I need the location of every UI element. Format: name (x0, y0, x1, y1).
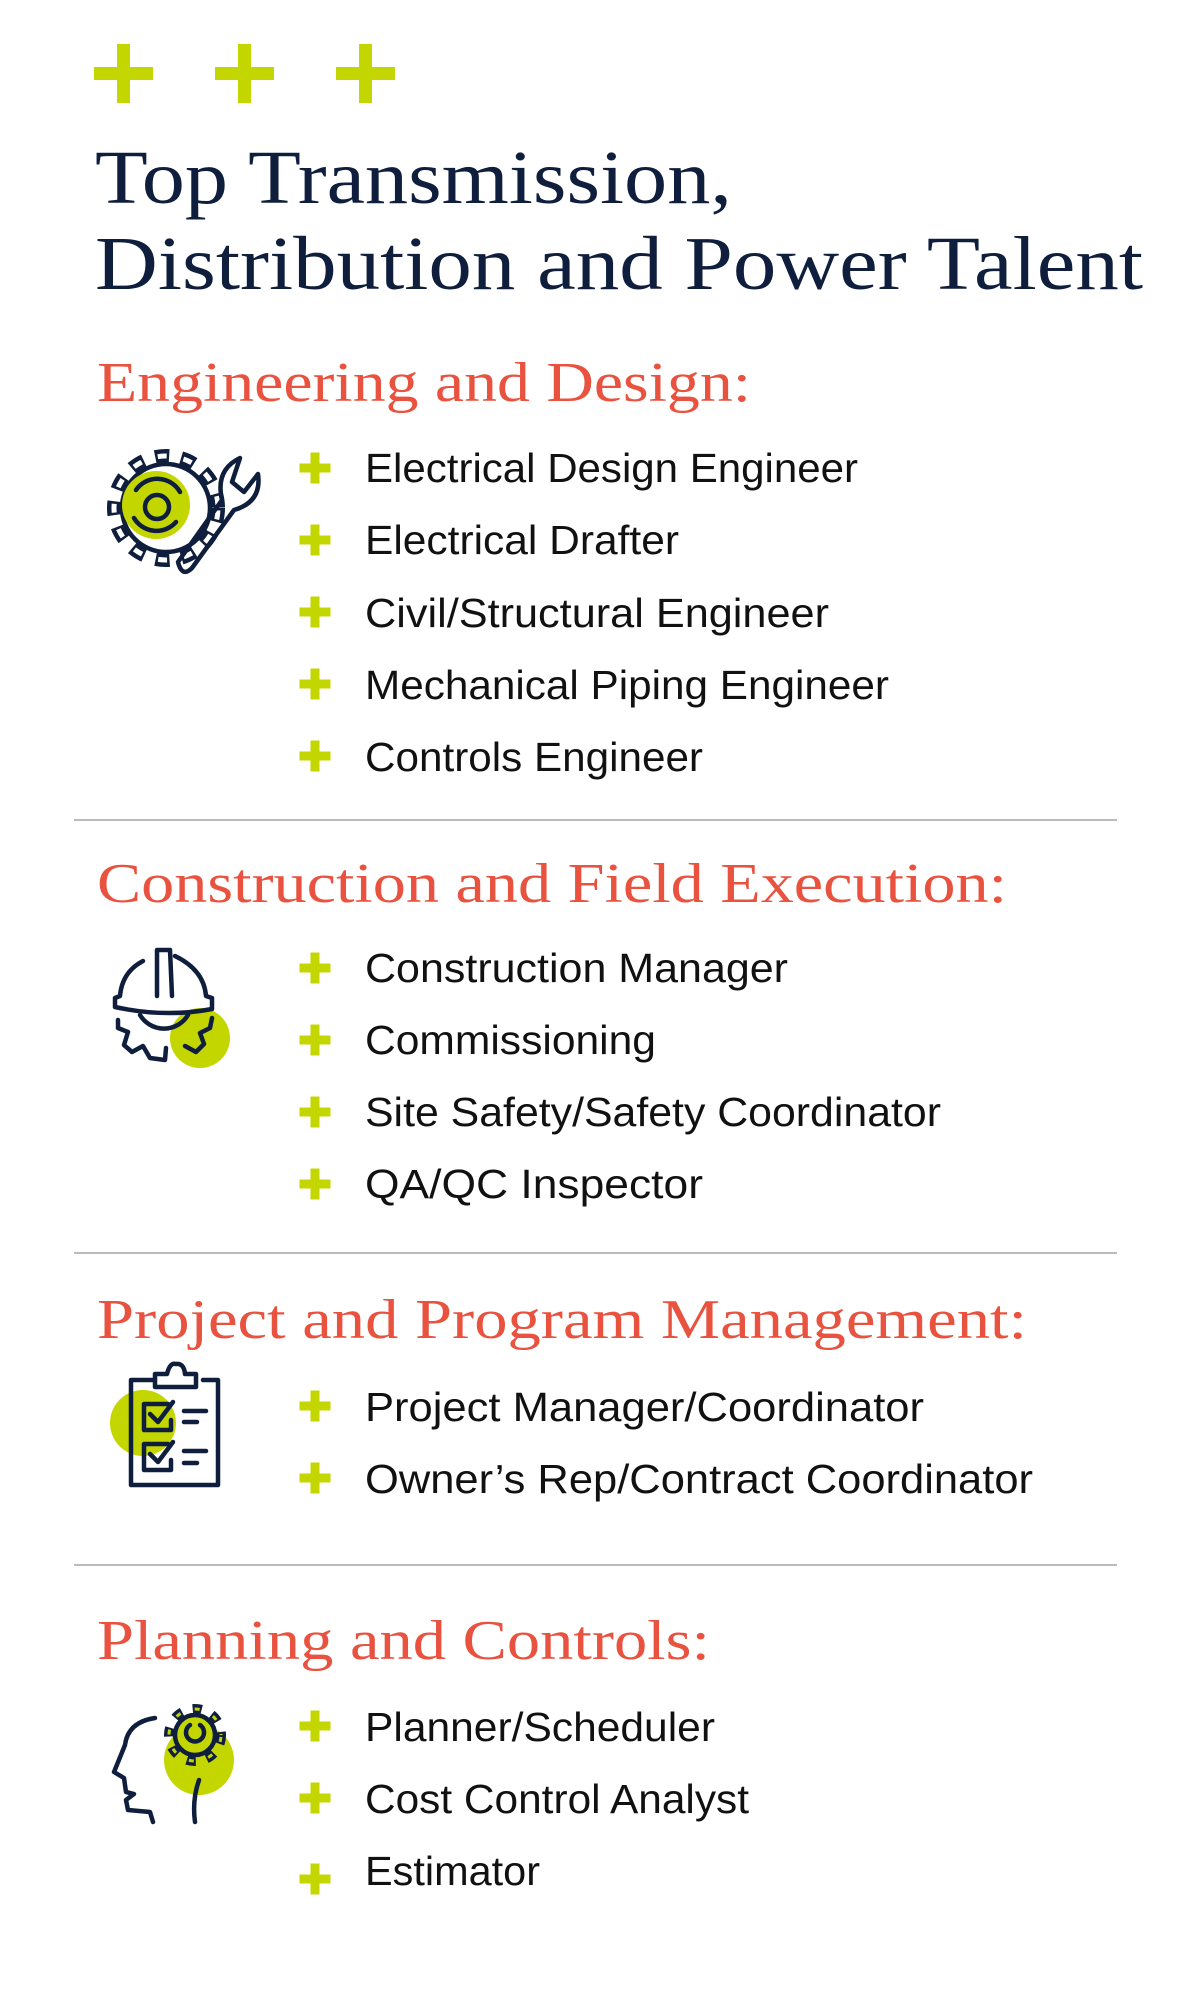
title: Distribution and Power Talent (95, 222, 1143, 306)
heading: Planning: Planning and Controls: (97, 1610, 710, 1672)
icon: head with gear (114, 1709, 234, 1822)
list: engineering: Electrical Drafter (365, 517, 679, 563)
list: engineering: Controls Engineer (365, 734, 703, 780)
list: project: Project Manager/Coordinator (365, 1384, 924, 1430)
title: Top Transmission, (95, 136, 732, 220)
decorative plus signs (94, 44, 395, 103)
list: engineering: Civil/Structural Engineer (365, 590, 829, 636)
list: construction: Site Safety/Safety Coordinator (365, 1089, 941, 1135)
list: engineering: Electrical Design Engineer (365, 445, 858, 491)
icon: hard hat with gear (115, 950, 230, 1068)
list: engineering (300, 445, 889, 780)
list: project: Owner’s Rep/Contract Coordinator (365, 1456, 1033, 1502)
list: planning: Cost Control Analyst (365, 1776, 750, 1822)
list: planning: Estimator (365, 1848, 540, 1894)
list: engineering: Mechanical Piping Engineer (365, 662, 889, 708)
heading: Project: Project and Program Management: (97, 1289, 1027, 1351)
list: planning (300, 1704, 750, 1894)
icon: clipboard checklist (110, 1364, 218, 1485)
list: construction (300, 945, 941, 1207)
list: planning: Planner/Scheduler (365, 1704, 715, 1750)
list: construction: Commissioning (365, 1017, 656, 1063)
list: project (300, 1384, 1033, 1502)
title (95, 136, 1143, 306)
heading: Construction: Construction and Field Execution: (97, 853, 1007, 915)
icon: gear and wrench (114, 456, 258, 572)
heading: Engineering and Design: Engineering and Design: (97, 352, 751, 414)
list: construction: QA/QC Inspector (365, 1161, 703, 1207)
list: construction: Construction Manager (365, 945, 788, 991)
